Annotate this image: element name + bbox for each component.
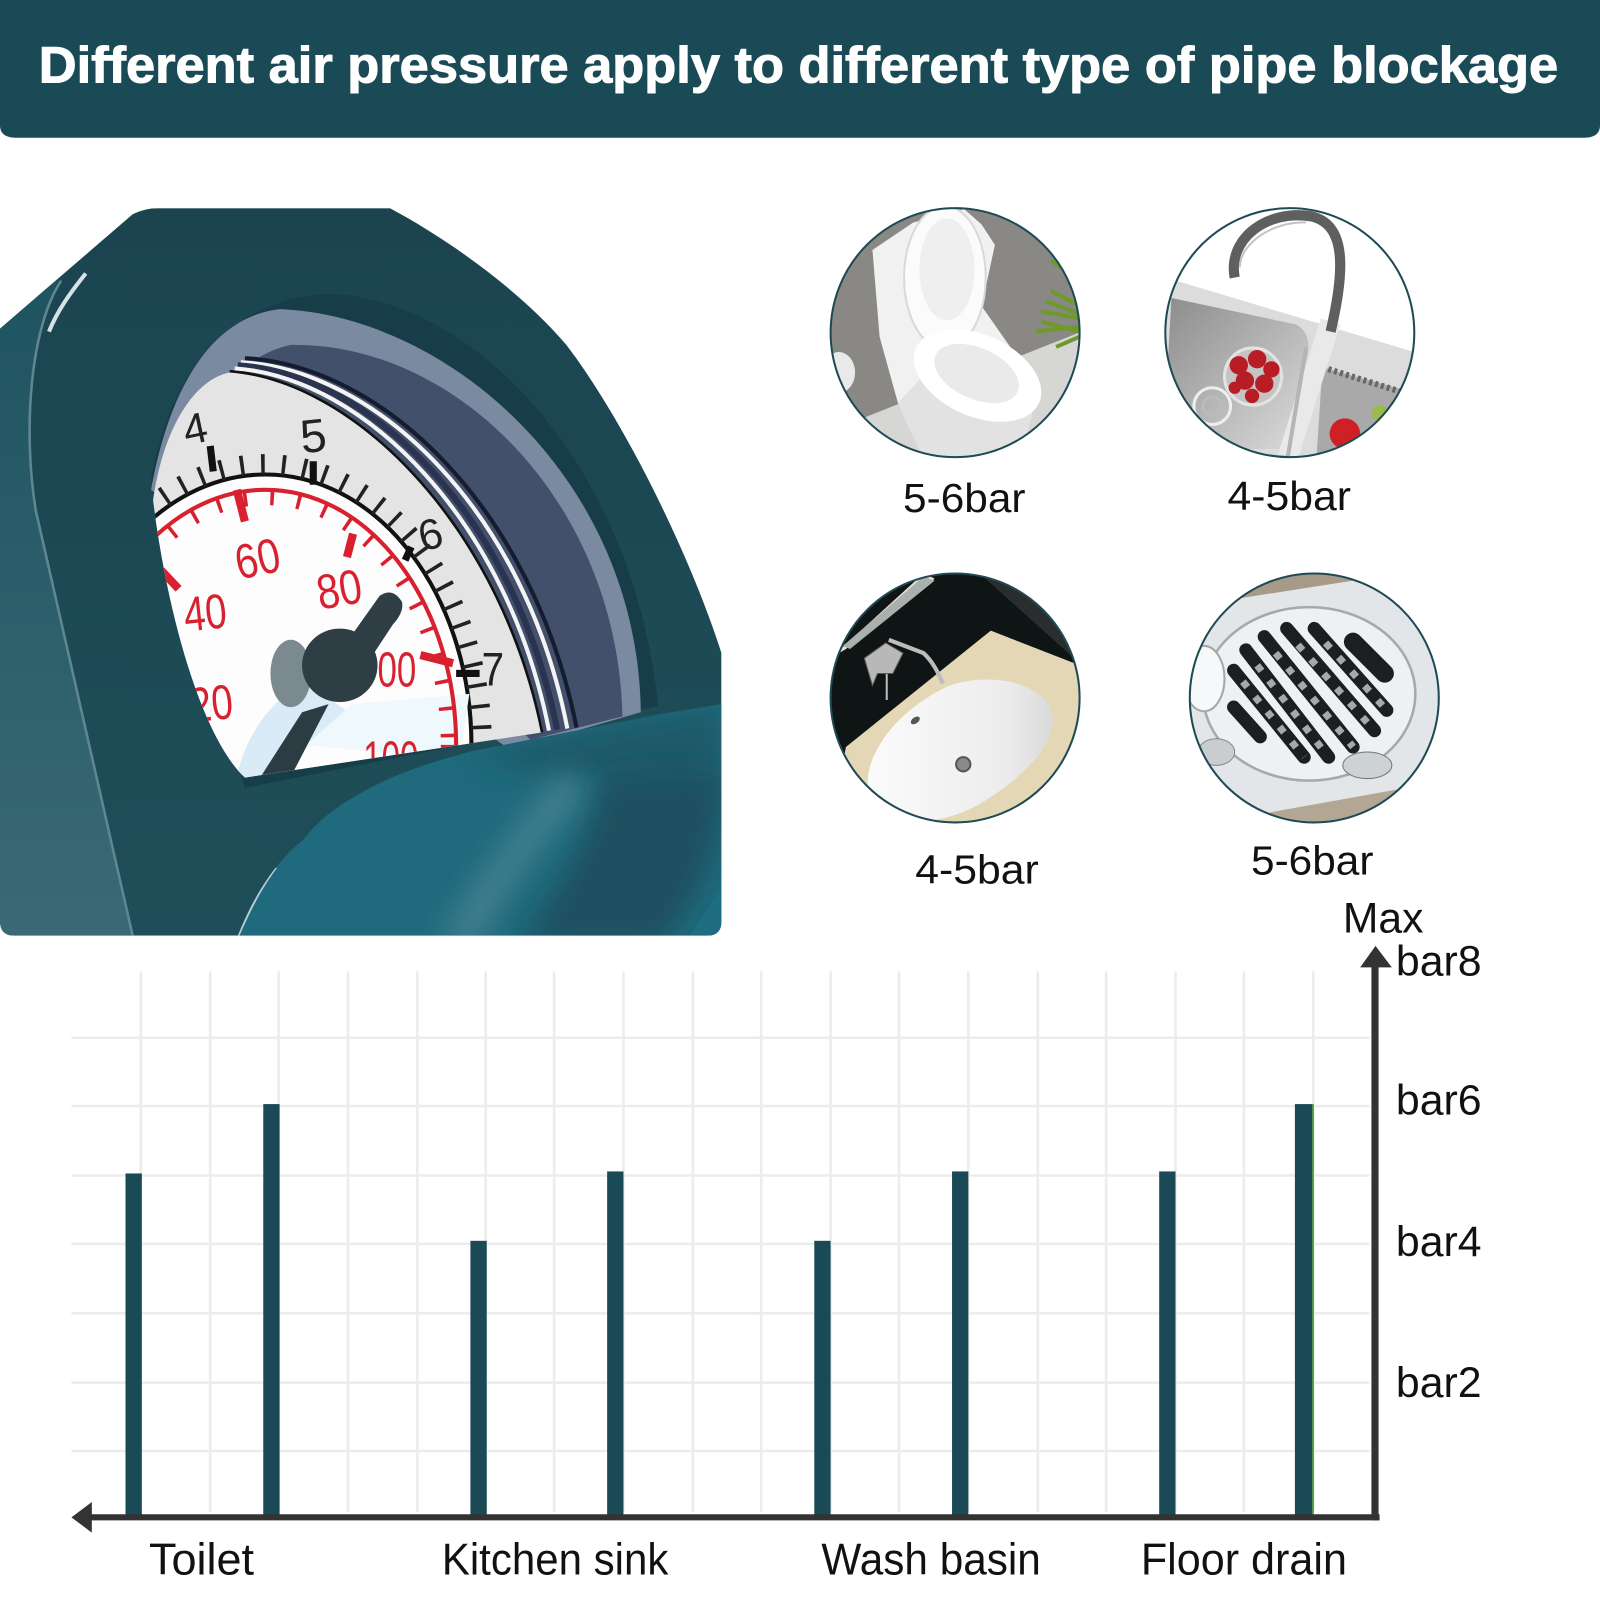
red dial numbers: 40 <box>181 584 229 643</box>
dial edge rings <box>230 358 577 733</box>
black ticks <box>155 454 492 730</box>
grey bezel ring <box>151 309 641 750</box>
label: sink pressure: 4-5bar <box>1228 473 1351 519</box>
red dial numbers <box>185 539 417 758</box>
needle <box>258 592 402 781</box>
gauge housing left side <box>0 276 133 936</box>
bars <box>126 1104 1314 1515</box>
label: toilet pressure: 5-6bar <box>903 475 1026 521</box>
black dial numbers: 5 <box>298 409 329 463</box>
vertical axis arrow <box>1360 946 1392 1520</box>
chart: pressure by fixture <box>71 895 1482 1584</box>
label: basin pressure: 4-5bar <box>915 847 1039 893</box>
photo: floor drain <box>1184 573 1439 822</box>
black dial numbers <box>179 403 504 696</box>
red dial numbers: 60 <box>230 528 285 591</box>
y axis labels: bar2 <box>1396 1359 1482 1407</box>
red dial numbers: 20 <box>187 675 236 733</box>
gauge window recess <box>151 294 658 788</box>
x axis labels: Floor drain <box>1141 1533 1347 1584</box>
photo: kitchen sink <box>1165 208 1414 459</box>
label: drain pressure: 5-6bar <box>1251 837 1373 883</box>
y axis labels <box>1343 895 1482 1407</box>
x axis labels: Wash basin <box>821 1533 1041 1584</box>
black dial numbers: 6 <box>413 509 448 561</box>
photo: toilet <box>822 206 1082 459</box>
x axis labels: Kitchen sink <box>442 1533 669 1584</box>
black dial numbers: 4 <box>179 403 212 455</box>
black dial numbers: 7 <box>482 644 504 696</box>
red ring and ticks <box>158 488 458 746</box>
title banner <box>0 0 1600 138</box>
horizontal axis arrow <box>71 1502 1380 1533</box>
panel: pressure gauge close-up <box>0 208 722 936</box>
x axis labels <box>149 1533 1347 1584</box>
y axis labels: bar6 <box>1396 1076 1482 1124</box>
housing front lip <box>230 699 730 944</box>
y axis labels: bar8 <box>1396 938 1482 986</box>
photo: wash basin <box>831 573 1080 827</box>
y axis labels: bar4 <box>1396 1218 1482 1266</box>
inner white scale <box>155 472 474 778</box>
slate inner ring <box>240 344 622 740</box>
dial face <box>153 372 541 778</box>
red dial numbers: 80 <box>313 560 366 621</box>
x axis labels: Toilet <box>149 1533 255 1584</box>
y axis labels: Max <box>1343 895 1423 943</box>
red dial numbers: 100 <box>363 733 418 787</box>
red dial numbers: 00 <box>378 644 416 698</box>
title: Different air pressure apply to different type of pipe blockage <box>39 37 1558 94</box>
